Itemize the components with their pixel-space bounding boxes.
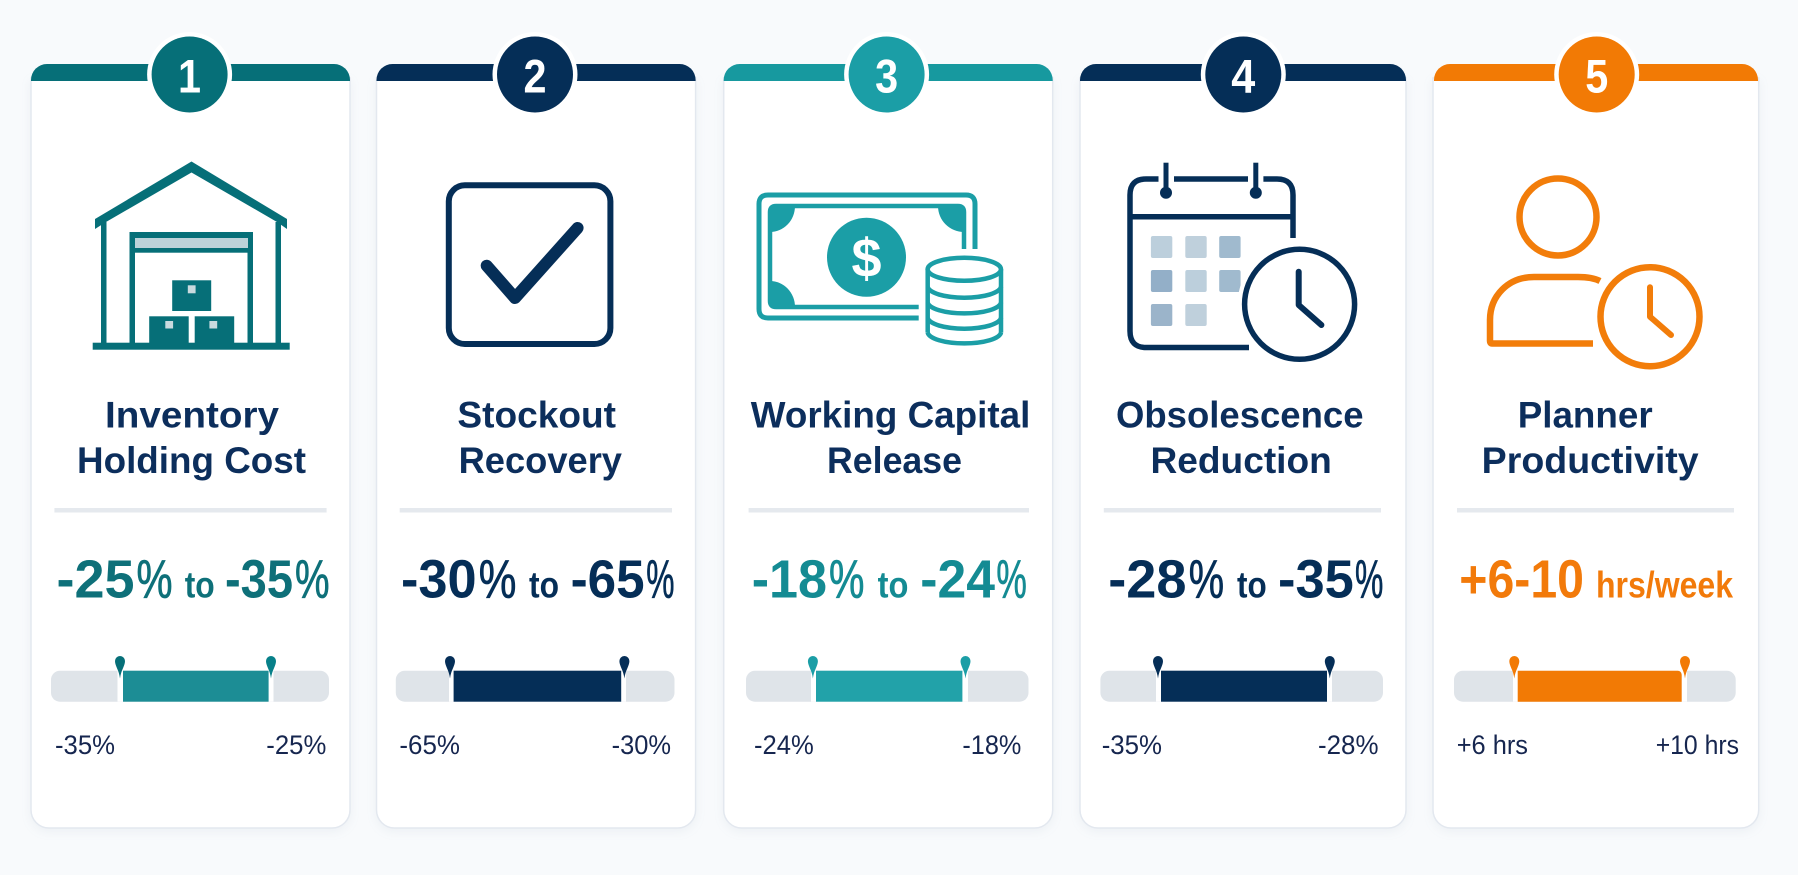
- panel: Planner Productivity: [1433, 32, 1759, 828]
- number badge 4: [1201, 32, 1286, 117]
- value range: -25: [56, 550, 134, 610]
- value range: %: [295, 550, 330, 610]
- value range: -18: [752, 550, 827, 610]
- value range: to: [185, 564, 215, 606]
- value range: -35: [1278, 550, 1354, 610]
- icon: banknote and coins: [759, 195, 1001, 343]
- value range: [1108, 550, 1383, 610]
- card body: [31, 78, 350, 828]
- card body: [724, 78, 1053, 828]
- heading: [751, 394, 1030, 481]
- value range: %: [1189, 550, 1224, 610]
- icon: clock: [1238, 242, 1362, 366]
- range labels: [1457, 730, 1739, 760]
- number badge 3: [844, 32, 929, 117]
- range bar: [51, 656, 329, 702]
- number badge 1: [147, 32, 232, 117]
- range bar: [1100, 656, 1383, 702]
- value range: [56, 550, 330, 610]
- value range: to: [529, 564, 559, 606]
- panel: Inventory Holding Cost: [31, 32, 350, 828]
- value range: %: [1355, 550, 1383, 610]
- heading: Stockout: [457, 394, 616, 436]
- value range: %: [996, 550, 1027, 610]
- value range: -65: [571, 550, 645, 610]
- number badge 1: 1: [178, 50, 201, 102]
- value range: [752, 550, 1027, 610]
- card body: [376, 78, 696, 828]
- icon: dollar coin: [827, 218, 906, 297]
- range labels: -24%: [754, 730, 814, 760]
- value range: -30: [401, 550, 477, 610]
- icon: clock: [1600, 267, 1700, 366]
- card top bar: [724, 64, 1053, 81]
- heading: [457, 394, 622, 481]
- range bar: [746, 656, 1028, 702]
- heading: Productivity: [1482, 440, 1699, 481]
- heading: [1116, 394, 1364, 481]
- number badge 3: 3: [875, 50, 898, 102]
- card top bar: [1434, 64, 1758, 81]
- icon: coin stack: [928, 258, 1001, 343]
- heading: [1482, 394, 1699, 481]
- range labels: +10 hrs: [1656, 730, 1739, 760]
- range labels: -18%: [962, 730, 1021, 760]
- heading: Inventory: [105, 394, 279, 436]
- icon: person and clock: [1490, 178, 1700, 366]
- value range: %: [829, 550, 864, 610]
- icon: calendar and clock: [1130, 163, 1362, 366]
- range labels: -25%: [266, 730, 326, 760]
- value range: [401, 550, 674, 610]
- heading: Recovery: [459, 440, 622, 481]
- range labels: -35%: [1102, 730, 1162, 760]
- heading: Reduction: [1150, 440, 1332, 481]
- panel: Obsolescence Reduction: [1080, 32, 1406, 828]
- heading: Release: [827, 440, 962, 481]
- icon: checkbox: [449, 185, 610, 344]
- card body: [1080, 78, 1406, 828]
- card top bar: [31, 64, 350, 81]
- range labels: -35%: [55, 730, 115, 760]
- range labels: -28%: [1318, 730, 1378, 760]
- value range: to: [1237, 564, 1267, 606]
- icon: warehouse: [93, 162, 290, 350]
- value range: [1459, 550, 1733, 610]
- card top bar: [1080, 64, 1406, 81]
- heading: Working Capital: [751, 394, 1030, 436]
- number badge 2: [492, 32, 578, 117]
- card body: [1433, 78, 1759, 828]
- value range: +6-10: [1459, 550, 1584, 610]
- value range: %: [646, 550, 674, 610]
- panel: Stockout Recovery: [376, 32, 696, 828]
- number badge 5: [1554, 32, 1639, 117]
- value range: hrs/week: [1596, 564, 1733, 606]
- range labels: [55, 730, 326, 760]
- value range: %: [136, 550, 172, 610]
- range labels: [399, 730, 671, 760]
- panel: Working Capital Release: [724, 32, 1053, 828]
- range labels: -65%: [399, 730, 460, 760]
- number badge 2: 2: [524, 50, 546, 102]
- range labels: [1102, 730, 1378, 760]
- value range: -35: [225, 550, 293, 610]
- value range: to: [878, 564, 908, 606]
- range labels: [754, 730, 1021, 760]
- range labels: -30%: [612, 730, 671, 760]
- range labels: +6 hrs: [1457, 730, 1528, 760]
- icon: dollar coin: $: [852, 227, 882, 289]
- value range: %: [479, 550, 516, 610]
- heading: Holding Cost: [77, 440, 306, 481]
- number badge 4: 4: [1231, 50, 1255, 102]
- range bar: [1454, 656, 1736, 702]
- card top bar: [376, 64, 696, 81]
- heading: Obsolescence: [1116, 394, 1364, 436]
- range bar: [396, 656, 674, 702]
- value range: -28: [1108, 550, 1186, 610]
- heading: [77, 394, 306, 481]
- value range: -24: [920, 550, 995, 610]
- number badge 5: 5: [1585, 50, 1608, 102]
- heading: Planner: [1518, 394, 1653, 436]
